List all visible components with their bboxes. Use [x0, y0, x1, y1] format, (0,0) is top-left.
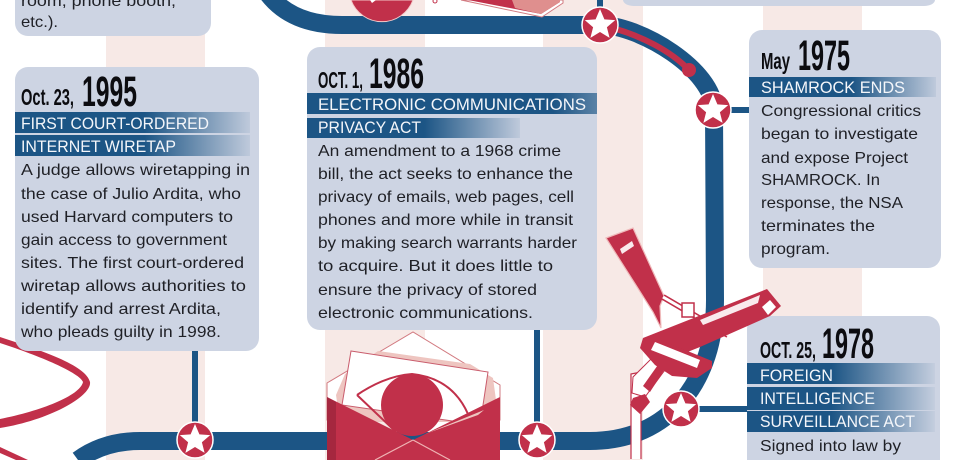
date [760, 320, 874, 368]
body text: gain access to government [21, 232, 228, 249]
card: Oct. 25, 1978 [747, 316, 940, 460]
body text: bill, the act seeks to enhance the [318, 166, 573, 183]
card: May 1975 [749, 30, 941, 268]
card: top left [15, 0, 211, 36]
card: Oct. 1, 1986 [307, 47, 597, 330]
body text [761, 103, 921, 258]
star: 1995 [177, 422, 213, 458]
date [21, 68, 137, 116]
body text: used Harvard computers to [21, 209, 233, 226]
red swirl [0, 337, 90, 460]
star: 1978 [663, 391, 699, 427]
body text: the case of Julio Ardita, who [21, 186, 241, 203]
date: May [761, 48, 790, 74]
envelope with eye [327, 332, 500, 460]
timeline track [78, 0, 749, 460]
body text: privacy of emails, web pages, cell [318, 189, 574, 206]
body text: phones and more while in transit [318, 212, 574, 229]
heading: INTELLIGENCE [760, 390, 875, 408]
security cameras on pole [606, 228, 781, 459]
body text [20, 162, 250, 341]
heading: SURVEILLANCE ACT [760, 413, 915, 431]
body text: to acquire. But it does little to [318, 258, 553, 275]
body text: response, the NSA [761, 195, 903, 212]
card: Oct. 23, 1995 [15, 67, 259, 351]
body text: A judge allows wiretapping in [21, 162, 250, 179]
date: OCT. 1, [318, 67, 363, 93]
date: 1986 [369, 50, 424, 98]
heading: FIRST COURT-ORDERED [21, 115, 209, 133]
body text: An amendment to a 1968 crime [318, 143, 561, 160]
date [761, 32, 850, 80]
date: Oct. 23, [21, 84, 74, 110]
star: top junction [582, 7, 618, 43]
top camera illustration [461, 0, 563, 17]
heading [747, 363, 935, 432]
body text: terminates the [761, 218, 875, 235]
heading [15, 112, 250, 156]
star: 1975 [695, 92, 731, 128]
heading: INTERNET WIRETAP [21, 138, 176, 156]
card: top right [623, 0, 935, 6]
body text: Signed into law by [760, 438, 901, 455]
body text: electronic communications. [318, 305, 533, 322]
body text: by making search warrants harder [318, 235, 578, 252]
date [318, 50, 424, 98]
body text: began to investigate [761, 126, 918, 143]
top eye illustration [351, 0, 437, 22]
pink background stripes [106, 0, 862, 460]
star: 1986 [519, 422, 555, 458]
date: OCT. 25, [760, 337, 816, 363]
body text [318, 143, 578, 322]
date: 1975 [798, 32, 850, 80]
red track overlay [616, 29, 696, 77]
body text: ensure the privacy of stored [318, 282, 537, 299]
date: 1978 [822, 320, 874, 368]
heading: FOREIGN [760, 367, 833, 385]
heading: SHAMROCK ENDS [761, 79, 905, 97]
heading: PRIVACY ACT [318, 119, 421, 137]
body text: who pleads guilty in 1998. [20, 324, 221, 341]
date: 1995 [82, 68, 137, 116]
body text: identify and arrest Ardita, [21, 301, 221, 318]
heading [307, 93, 597, 138]
card: top left: etc.). [21, 14, 58, 31]
body text: program. [761, 241, 830, 258]
station star markers [177, 7, 731, 458]
body text: and expose Project [761, 150, 909, 167]
body text: SHAMROCK. In [761, 172, 880, 189]
heading: ELECTRONIC COMMUNICATIONS [318, 96, 586, 114]
body text: sites. The first court-ordered [21, 255, 244, 272]
body text: wiretap allows authorities to [20, 278, 246, 295]
body text: Congressional critics [761, 103, 921, 120]
